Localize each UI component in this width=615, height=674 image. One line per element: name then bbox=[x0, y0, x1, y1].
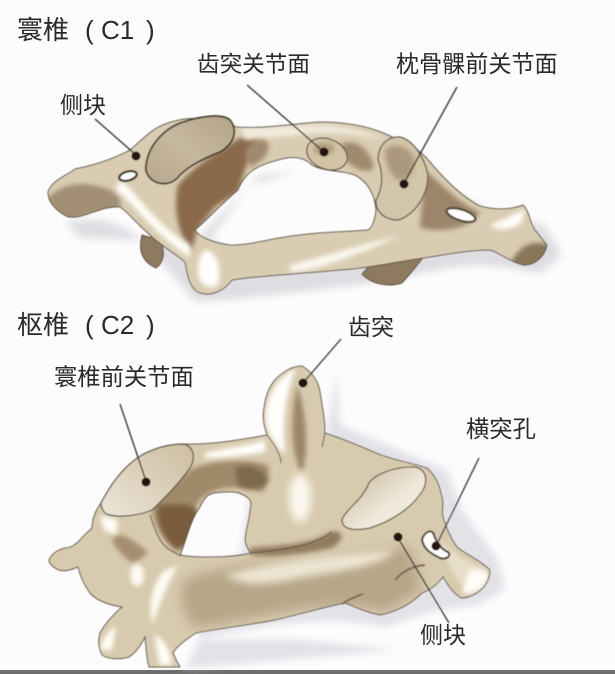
bone outline C1 bbox=[48, 118, 547, 294]
title: C1: ( bbox=[85, 15, 94, 45]
marker dots C1 bbox=[132, 148, 408, 188]
bone body C1 bbox=[48, 118, 547, 294]
title: C1: ) bbox=[146, 15, 155, 45]
facet: right superior C2 bbox=[342, 467, 426, 529]
bottom bar bbox=[0, 670, 615, 674]
ridge marks C2 bbox=[342, 565, 425, 604]
label: 齿突: 齿突 bbox=[348, 314, 394, 340]
transverse foramen C2 bbox=[422, 531, 449, 559]
transverse foramen right C1 bbox=[445, 205, 477, 225]
cast shadow C1 bbox=[65, 170, 562, 302]
marker lines C2 bbox=[120, 339, 479, 623]
cast shadow C2 bbox=[185, 370, 505, 668]
facet shade right bbox=[385, 146, 414, 180]
facet: left superior C1 bbox=[146, 116, 234, 184]
shading C1 bbox=[46, 125, 552, 287]
label: 侧块 C2: 侧块 bbox=[420, 622, 466, 648]
title: C2: C2 bbox=[101, 310, 134, 340]
title: C2: ( bbox=[85, 310, 94, 340]
marker dots C2 bbox=[142, 378, 440, 550]
illustration: axis C2 bbox=[49, 339, 505, 668]
label: 枕骨髁前关节面: 枕骨髁前关节面 bbox=[396, 51, 558, 77]
facet shade dens bbox=[314, 143, 334, 155]
marker lines C1 bbox=[95, 85, 457, 183]
label: 寰椎前关节面: 寰椎前关节面 bbox=[54, 364, 194, 390]
facet: dens C1 bbox=[302, 132, 352, 176]
shading C2 bbox=[100, 368, 488, 665]
label: 横突孔: 横突孔 bbox=[466, 416, 536, 442]
bone outline C2 bbox=[49, 366, 490, 667]
illustration: atlas C1 bbox=[46, 85, 562, 302]
lower tubercle parts bbox=[141, 235, 425, 285]
label: 侧块 C1: 侧块 bbox=[60, 92, 106, 118]
dens base lines bbox=[150, 433, 332, 556]
facet: right superior C1 bbox=[376, 137, 428, 220]
title: C2: 枢椎 bbox=[17, 310, 69, 340]
transverse foramen left C1 bbox=[118, 169, 138, 183]
title: C1: C1 bbox=[101, 15, 134, 45]
label: 齿突关节面: 齿突关节面 bbox=[197, 52, 310, 77]
facet: left superior C2 bbox=[101, 444, 193, 516]
title: C2: ) bbox=[146, 310, 155, 340]
bone body C2 bbox=[49, 366, 490, 667]
title: C1: 寰椎 bbox=[17, 15, 69, 45]
